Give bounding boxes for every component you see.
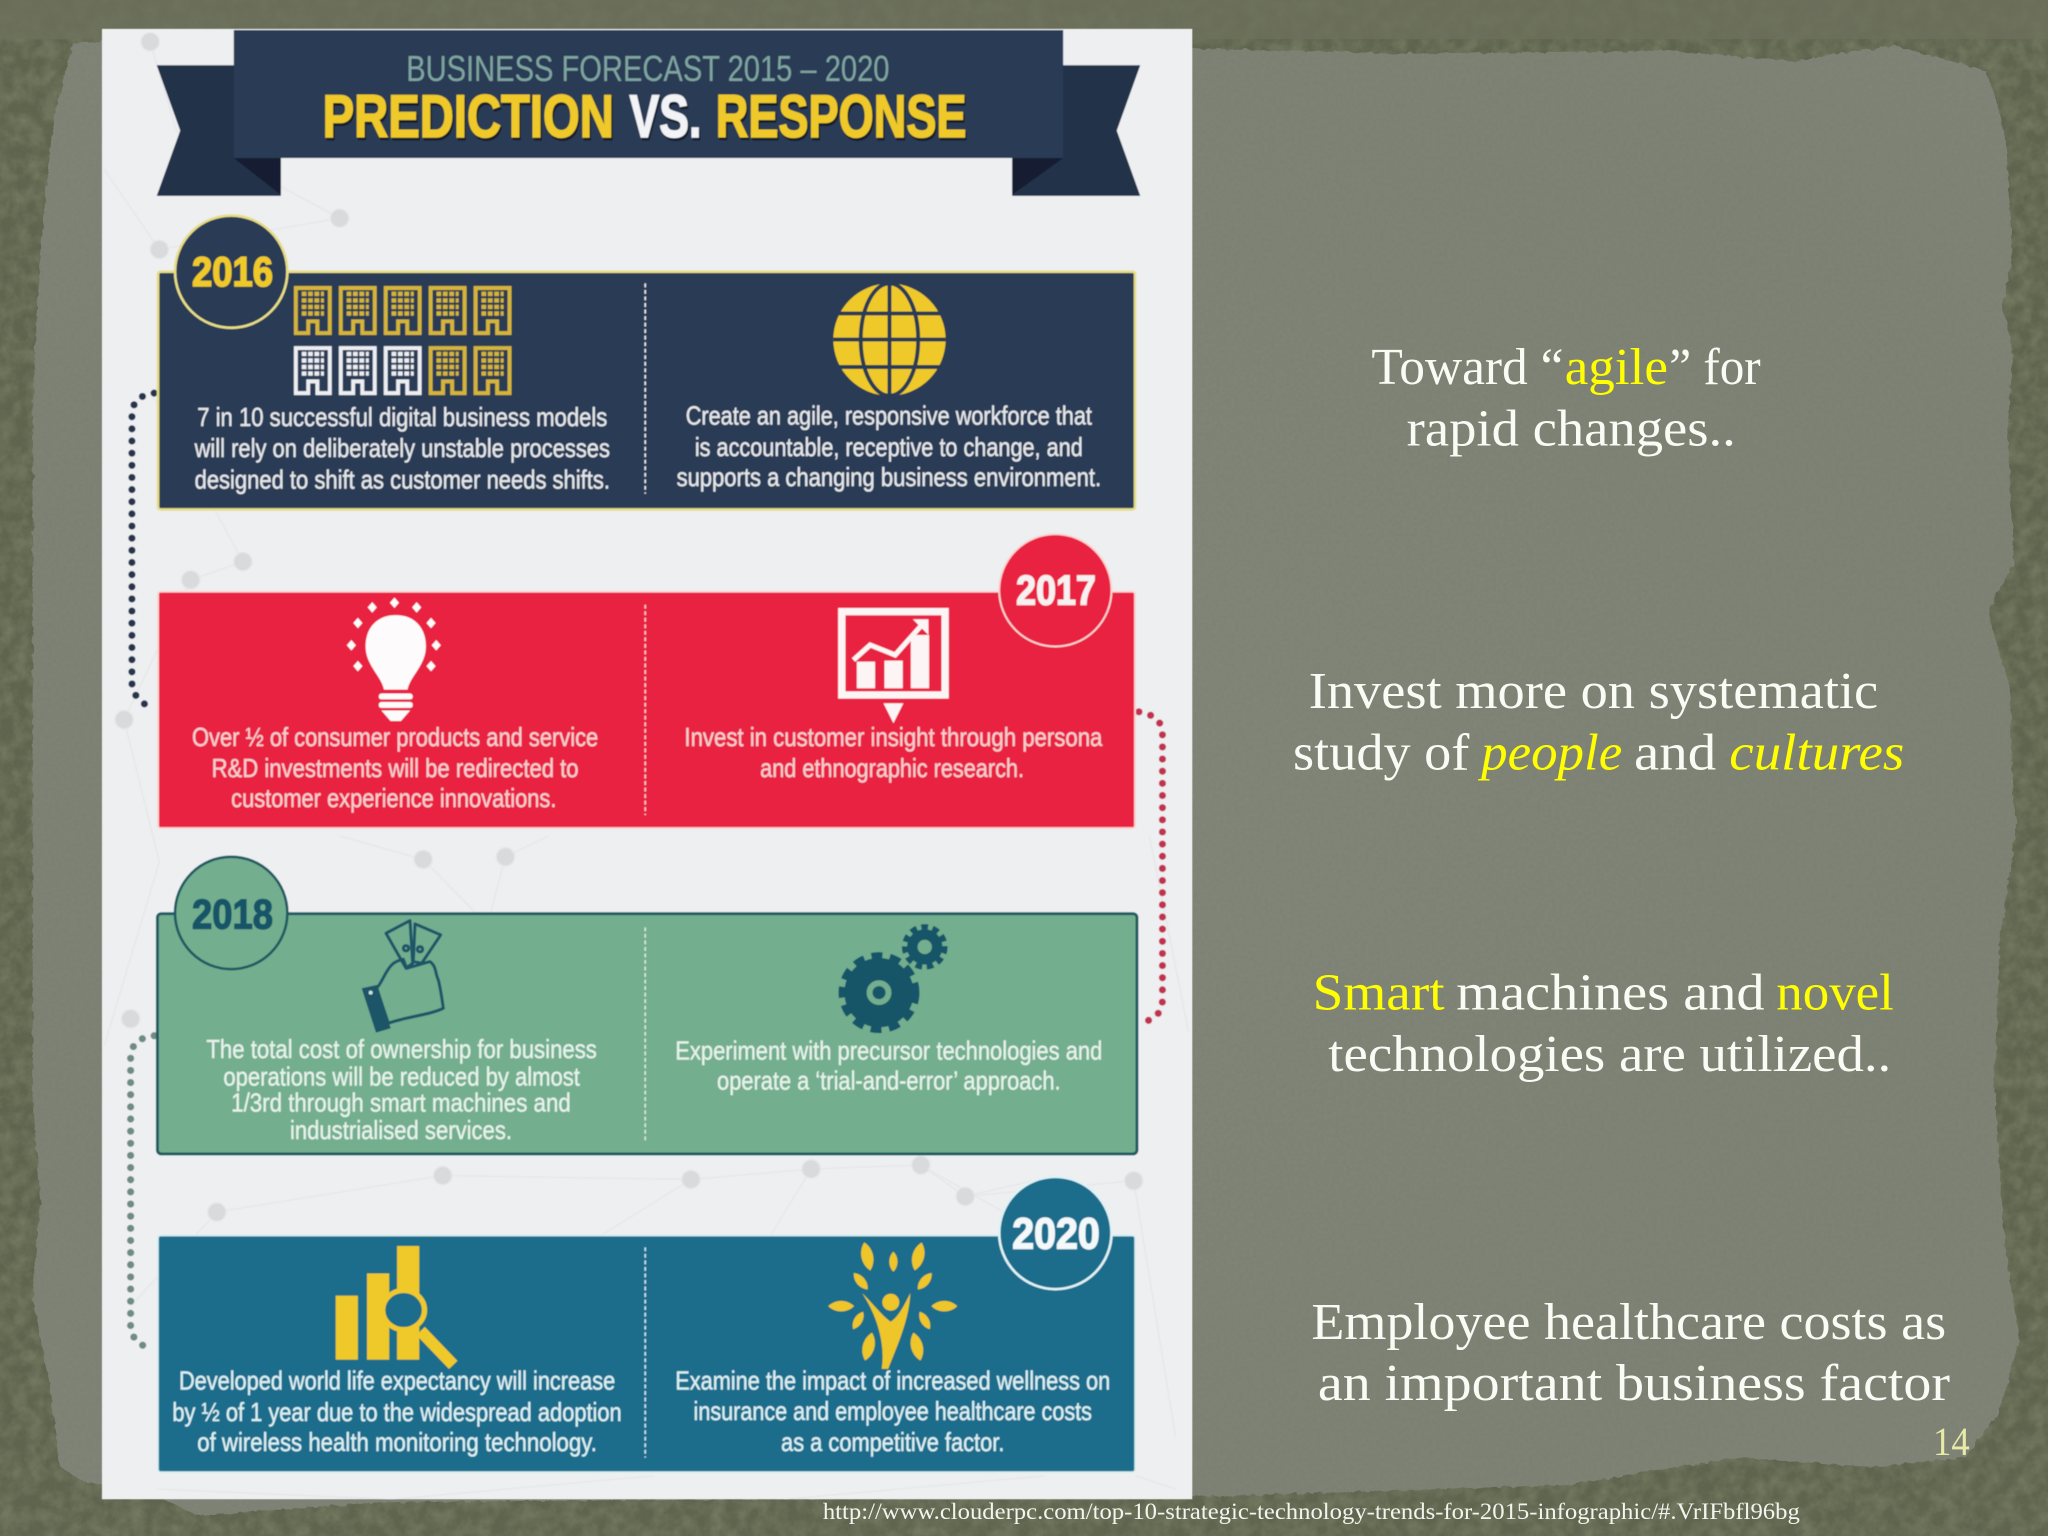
text: 2016 prediction xyxy=(194,402,610,494)
year badge 2020: 2020 xyxy=(1012,1211,1100,1259)
text block: healthcare: an important business factor xyxy=(1318,1354,1950,1412)
text: 2018 response: Experiment with precursor technologies and xyxy=(675,1035,1102,1065)
icon: buildings xyxy=(296,288,510,393)
panel: 2020 xyxy=(158,1177,1135,1472)
text: 2017 prediction: Over ½ of consumer products and service xyxy=(192,722,598,752)
panel: infographic xyxy=(102,29,1192,1499)
text: 2017 response: Invest in customer insight through persona xyxy=(684,722,1103,752)
year badge 2016 xyxy=(175,216,287,328)
text: 2020 prediction: of wireless health monitoring technology. xyxy=(197,1427,597,1457)
text: 2016 response: supports a changing business environment. xyxy=(677,462,1101,492)
text: 2020 prediction: Developed world life expectancy will increase xyxy=(179,1366,615,1396)
text: 2020 prediction: by ½ of 1 year due to the widespread adoption xyxy=(172,1397,622,1427)
text block: people and cultures: and xyxy=(1634,723,1716,781)
title: prediction vs response: RESPONSE xyxy=(716,83,967,150)
title: prediction vs response xyxy=(323,83,967,150)
text: 2018 prediction: industrialised services. xyxy=(290,1115,512,1145)
title: prediction vs response: PREDICTION xyxy=(323,83,614,150)
text: 2020 response: Examine the impact of increased wellness on xyxy=(675,1366,1110,1396)
text: 2017 response: and ethnographic research. xyxy=(760,753,1024,783)
text block: smart machines: Smart xyxy=(1313,964,1445,1022)
year badge 2017 xyxy=(999,534,1112,647)
year badge 2018 xyxy=(175,857,287,969)
panel: 2018 xyxy=(157,857,1137,1154)
text: 2016 response xyxy=(677,400,1101,492)
year badge 2018: 2018 xyxy=(192,891,273,938)
year badge 2017: 2017 xyxy=(1016,567,1096,614)
text block: agile xyxy=(1371,338,1761,457)
icon: bars with magnifier xyxy=(336,1246,453,1365)
text block: healthcare: Employee healthcare costs as xyxy=(1311,1293,1946,1351)
text: 2016 prediction: will rely on deliberately unstable processes xyxy=(194,433,610,463)
text block: agile: rapid changes.. xyxy=(1407,399,1736,457)
text block: people and cultures: people xyxy=(1477,723,1622,781)
text: 2018 prediction: The total cost of ownership for business xyxy=(206,1034,597,1064)
text block: people and cultures xyxy=(1293,662,1904,781)
title ribbon xyxy=(157,30,1140,196)
icon: presentation chart xyxy=(842,612,945,723)
text: 2018 response xyxy=(675,1035,1102,1095)
text: 2018 response: operate a ‘trial-and-error’ approach. xyxy=(717,1065,1061,1095)
infographic background xyxy=(102,29,1192,1499)
text block: people and cultures: Invest more on systematic xyxy=(1309,662,1878,720)
year badge 2016: 2016 xyxy=(192,248,273,295)
text block: people and cultures: cultures xyxy=(1729,723,1904,781)
panel: 2016 xyxy=(158,216,1135,509)
text block: people and cultures: study of xyxy=(1293,723,1470,781)
dotted connector 2016 to 2017 xyxy=(132,393,154,707)
text block: agile: ” for xyxy=(1669,338,1761,396)
text block: healthcare xyxy=(1311,1293,1950,1412)
icon: hand with money xyxy=(362,921,443,1033)
text block: smart machines xyxy=(1313,964,1894,1083)
text: 2018 prediction: 1/3rd through smart machines and xyxy=(231,1088,571,1118)
text: 2017 prediction: R&D investments will be redirected to xyxy=(212,753,579,783)
network pattern xyxy=(104,33,1189,1499)
icon: globe xyxy=(833,283,946,396)
page number: 14 xyxy=(1933,1419,1970,1464)
title: prediction vs response: VS. xyxy=(630,83,701,150)
text: 2018 prediction: operations will be reduced by almost xyxy=(223,1061,581,1091)
text: 2016 prediction: 7 in 10 successful digital business models xyxy=(197,402,607,432)
text block: agile: Toward “ xyxy=(1371,338,1563,396)
title: business forecast: BUSINESS FORECAST 2015 – 2020 xyxy=(406,48,889,89)
text: 2020 prediction xyxy=(172,1366,622,1457)
year badge 2020 xyxy=(999,1177,1112,1289)
text: 2020 response: as a competitive factor. xyxy=(781,1427,1004,1457)
text: 2017 prediction xyxy=(192,722,598,813)
text: 2016 prediction: designed to shift as customer needs shifts. xyxy=(195,464,610,494)
text: 2016 response: is accountable, receptive to change, and xyxy=(695,432,1083,462)
dotted connector 2017 to 2018 xyxy=(1139,712,1162,1023)
text: 2020 response xyxy=(675,1366,1110,1457)
text block: smart machines: machines and xyxy=(1456,964,1765,1022)
panel: 2017 xyxy=(158,534,1135,828)
text: 2017 response xyxy=(684,722,1103,783)
icon: wellness tree xyxy=(828,1241,957,1369)
text block: agile: agile xyxy=(1565,338,1668,396)
text: 2018 prediction xyxy=(206,1034,597,1145)
text: 2020 response: insurance and employee healthcare costs xyxy=(694,1396,1092,1426)
text block: smart machines: technologies are utilized.. xyxy=(1328,1025,1891,1083)
dotted connector 2018 to 2020 xyxy=(131,1036,154,1348)
source url: http://www.clouderpc.com/top-10-strategic-technology-trends-for-2015-infographic/#.VrIFbfl96bg xyxy=(823,1499,1800,1524)
text: 2016 response: Create an agile, responsive workforce that xyxy=(686,400,1093,430)
icon: gears xyxy=(844,927,944,1028)
text block: smart machines: novel xyxy=(1776,964,1894,1022)
text: 2017 prediction: customer experience innovations. xyxy=(231,783,556,813)
icon: light bulb xyxy=(347,598,441,721)
